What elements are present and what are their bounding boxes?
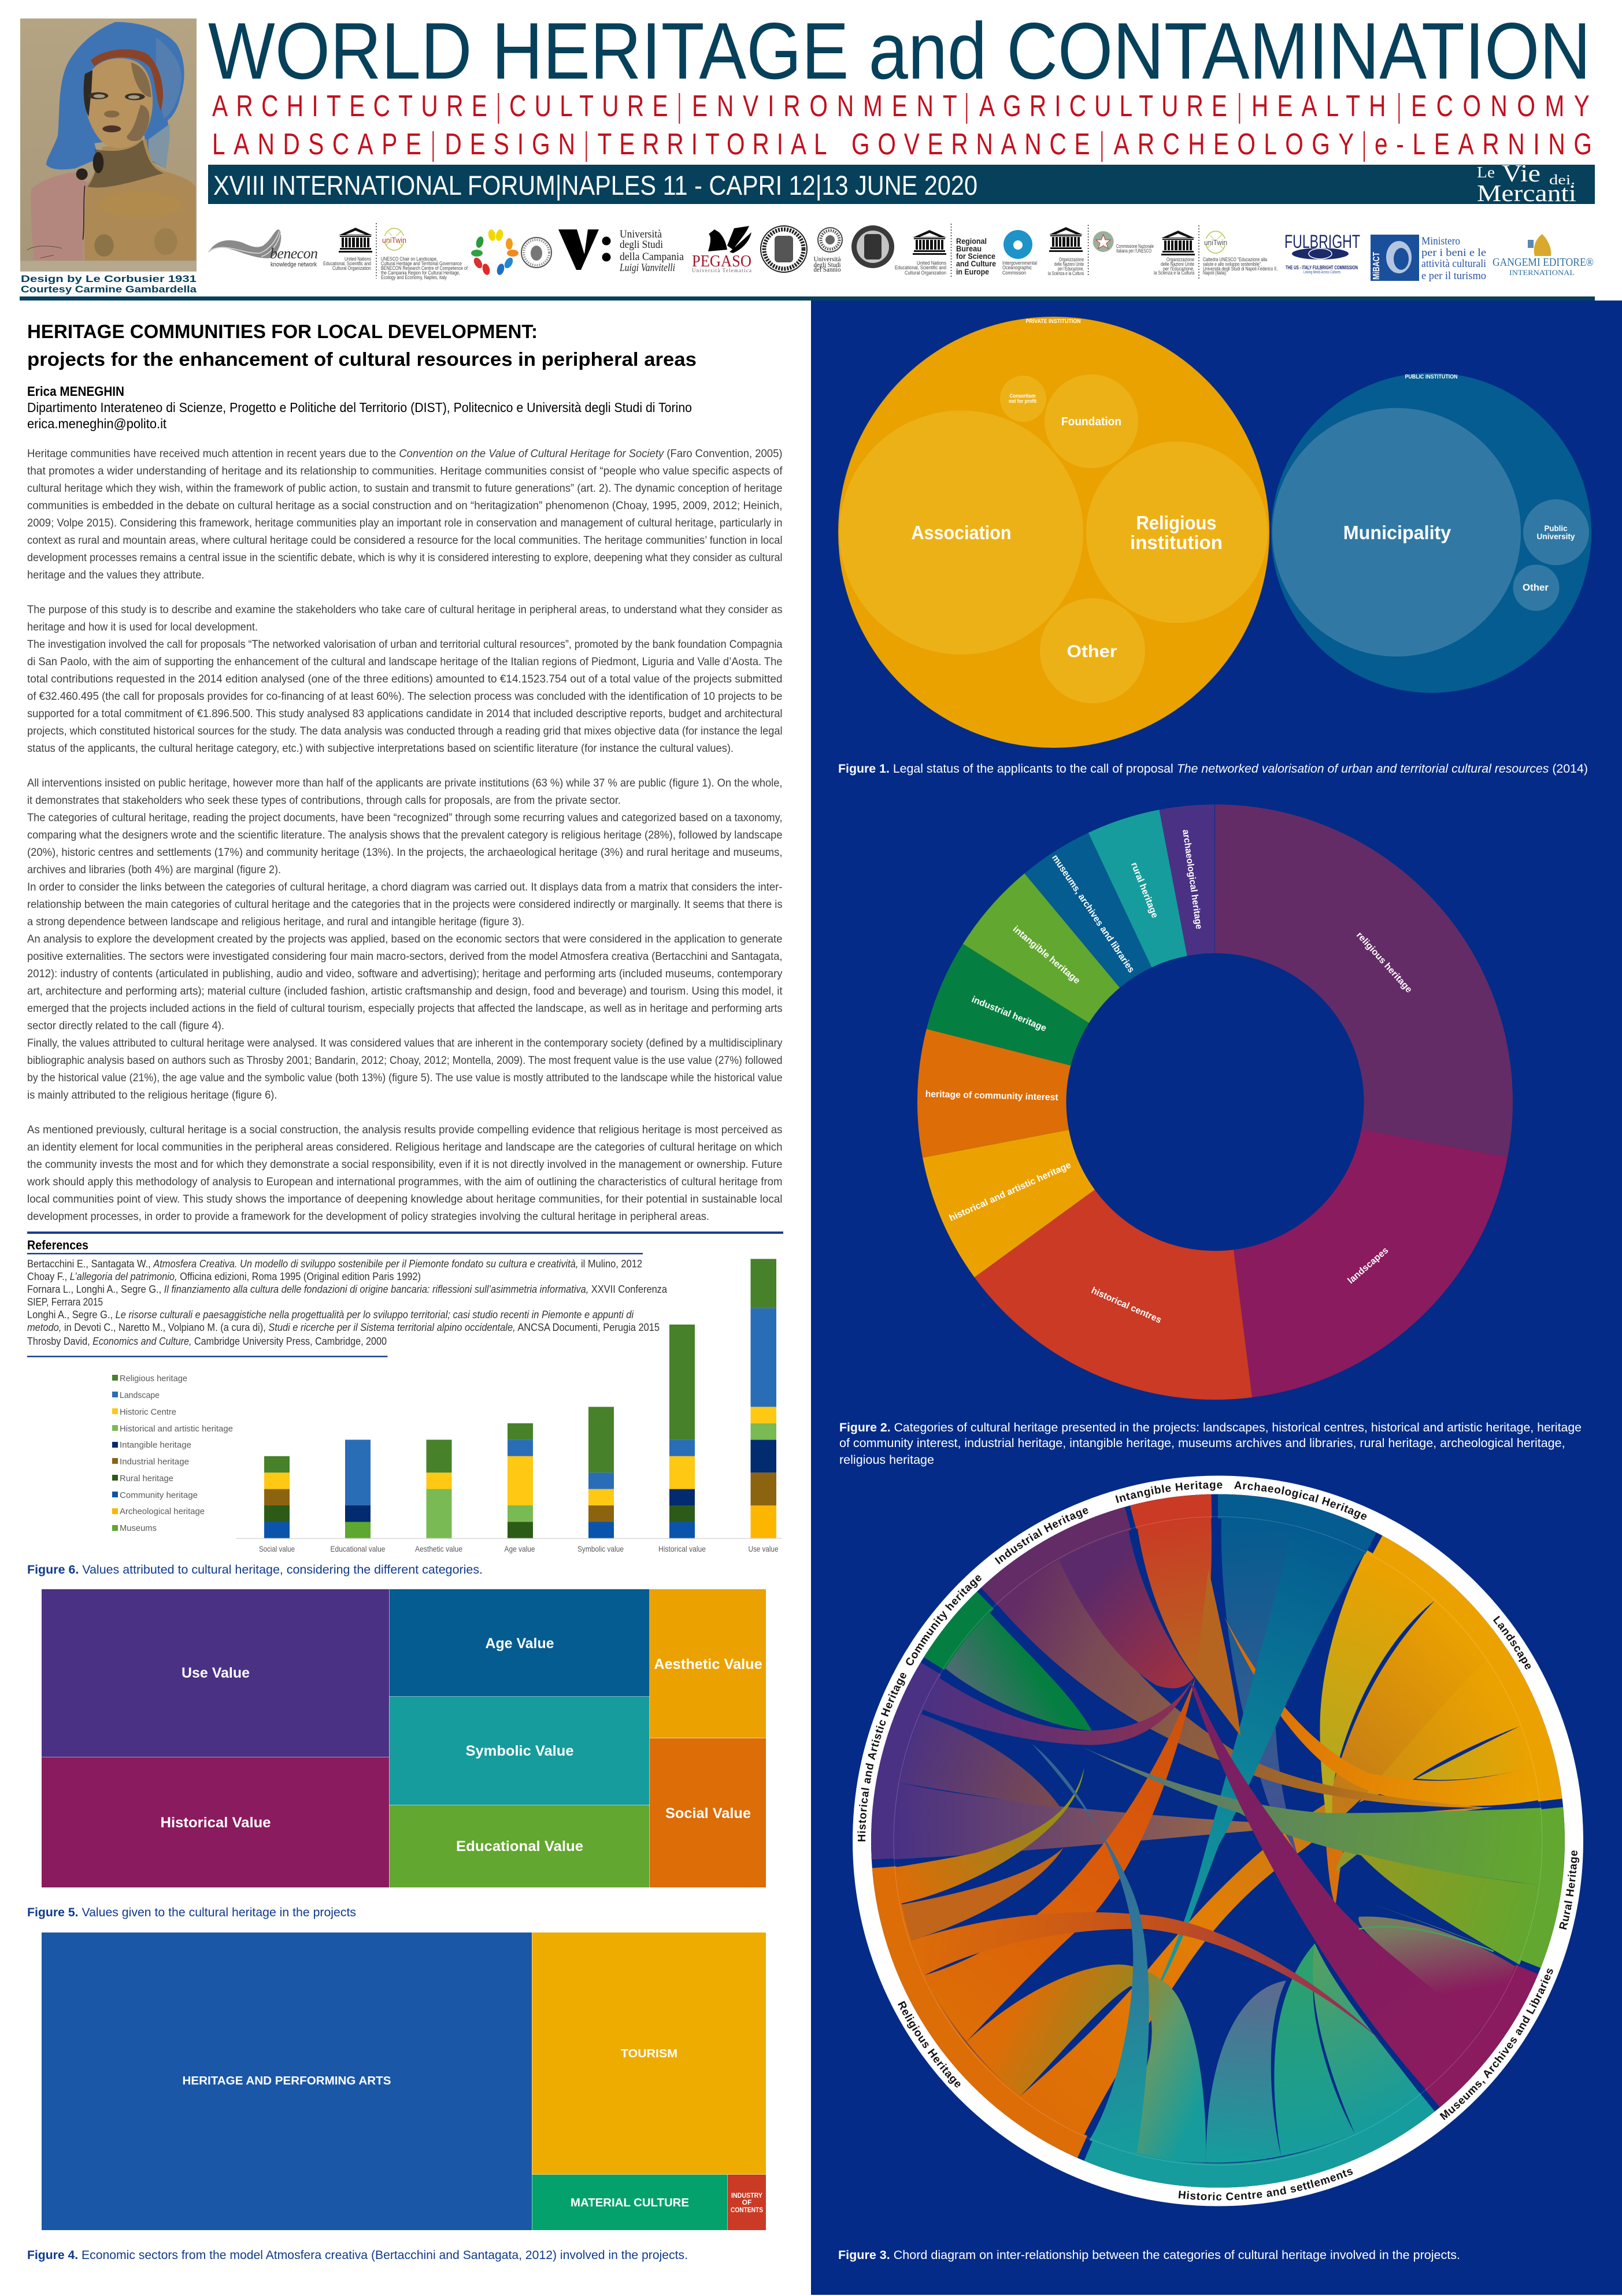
chart legend: Historical and artistic heritage — [120, 1424, 233, 1434]
donut labels: rural heritage — [1129, 861, 1160, 919]
logo: UNESCO Italian commission: per l'Educazione, — [1058, 266, 1084, 272]
cell: symbolic value — [390, 1697, 650, 1805]
bar: age value — [508, 1423, 533, 1538]
logo: Vanvitelli: della Campania — [620, 251, 684, 263]
logo: Gangemi Editore: INTERNATIONAL — [1509, 268, 1575, 277]
forum date band — [208, 165, 1595, 204]
chart legend: Historic Centre — [120, 1407, 176, 1417]
paragraph: results: positive externalities. The sectors were investigated considering four main macro-sectors, derived from the model Atmosfera creativa (Bertacchini and Santagata, — [27, 951, 783, 963]
logo: UNESCO Regional Bureau: for Science — [956, 251, 995, 261]
bubble group: private institution: institution — [1130, 532, 1223, 553]
chord ribbons — [894, 1515, 1543, 2163]
subtitle disciplines: | — [1238, 88, 1242, 124]
logo: UNESCO chair Health: Organizzazione — [1166, 257, 1194, 262]
Le Vie dei Mercanti logotype: dei. — [1549, 173, 1575, 188]
logo: Vanvitelli: Luigi Vanvitelli — [619, 262, 675, 274]
logo: UNESCO chair Health — [1154, 225, 1277, 280]
paragraph: results: art, architecture and performing arts); material culture (included fashion, artistic craftsmanship and design, food and beverage) and tourism. Using this model, it — [27, 985, 783, 997]
logo: UNESCO chair Landscape: Cultural Organization — [332, 265, 371, 271]
axis labels — [259, 1544, 779, 1553]
logo: Fulbright — [1284, 231, 1360, 275]
cell: material culture — [532, 2175, 727, 2230]
logo: UNESCO chair Landscape: uniTwin — [382, 236, 406, 244]
bar: use value — [750, 1259, 776, 1538]
portrait credit: Courtesy Carmine Gambardella — [21, 284, 197, 295]
bubble group: private institution: not for profit — [1009, 398, 1036, 404]
logo: Gangemi Editore: GANGEMI EDITORE® — [1493, 256, 1594, 269]
cell: use value — [42, 1589, 389, 1757]
cell: historical value — [42, 1757, 389, 1887]
logo: UNESCO chair Health: la Scienza e la Cultura — [1154, 270, 1194, 276]
axis labels: Use value — [748, 1544, 779, 1553]
subtitle disciplines — [212, 88, 1592, 162]
axis labels: Aesthetic value — [415, 1544, 462, 1553]
caption: figure 3: Figure 3. Chord diagram on inter-relationship between the categories of cultural heritage involved in the projects. — [838, 2249, 1460, 2262]
article heading — [27, 321, 697, 370]
logo: Fulbright: THE US - ITALY FULBRIGHT COMMISSION — [1286, 265, 1358, 270]
donut segments — [992, 879, 1438, 1325]
logo: coloured hands ring — [471, 229, 519, 276]
logo: UNESCO Regional Bureau: Cultural Organization — [905, 270, 946, 276]
caption: figure 4: Figure 4. Economic sectors from the model Atmosfera creativa (Bertacchini and Santagata, 2012) involved in the projects. — [27, 2249, 688, 2262]
logo: Pegaso — [692, 226, 751, 273]
paragraph: results: it demonstrates that stakeholders who seek these types of contributions, through calls for proposals, are from the private sector. — [27, 795, 621, 807]
portrait credit — [21, 273, 197, 295]
cell: industry of contents: CONTENTS — [731, 2206, 763, 2214]
subtitle disciplines: CULTURE — [509, 89, 668, 123]
cell: industry of contents — [727, 2175, 766, 2230]
figure 4: economic sectors treemap — [42, 1933, 766, 2230]
logo: UNESCO chair Health: Università degli Studi di Napoli Federico II, — [1203, 266, 1277, 272]
paragraph: introduction: context as rural and mountain areas, where cultural heritage could be considered a resource for the local communities. The heritage communities’ function in local — [27, 535, 783, 547]
bar: symbolic value — [588, 1407, 614, 1538]
cell: historical value: Historical Value — [161, 1815, 271, 1831]
logo: Vanvitelli: Università — [620, 228, 662, 240]
cell: tourism — [532, 1933, 766, 2174]
paragraph: purpose — [27, 604, 783, 755]
axis labels: Age value — [504, 1544, 535, 1553]
logo: Pegaso: Università Telematica — [692, 268, 751, 273]
subtitle disciplines: DESIGN — [445, 127, 575, 161]
bubble group: private institution: Foundation — [1061, 416, 1121, 428]
logo: Fulbright: Linking Minds Across Cultures — [1303, 270, 1340, 275]
logo: Università del Sannio: degli Studi — [814, 261, 841, 269]
axis labels: Symbolic value — [577, 1544, 624, 1553]
logo: UNESCO chair Landscape: the Campania Region for Cultural Heritage, — [381, 270, 460, 276]
logo: UNESCO chair Landscape: BENECON Research Centre of Competence of — [381, 265, 468, 271]
subtitle disciplines: HEALTH — [1251, 89, 1386, 123]
logo: Università del Sannio — [814, 228, 842, 273]
cell: heritage and performing arts: HERITAGE AND PERFORMING ARTS — [183, 2075, 391, 2087]
bubble group: private institution: Association — [911, 522, 1012, 543]
cell: heritage and performing arts — [42, 1933, 532, 2230]
subtitle disciplines: | — [497, 88, 501, 124]
paragraph: results: (20%), historic centres and settlements (17%) and community heritage (13%). In the projects, the archaeological heritage (3%) and rural heritage and museums, — [27, 847, 783, 859]
bubble group: private institution — [838, 317, 1269, 748]
donut labels: landscapes — [1346, 1245, 1390, 1286]
bar: aesthetic value — [427, 1440, 452, 1538]
bubble group: public institution: Other — [1523, 582, 1549, 593]
cell: social value — [650, 1738, 766, 1887]
logo: UNESCO Italian commission: delle Nazioni Unite — [1054, 261, 1084, 267]
paragraph: conclusions: work should apply this methodology of analysis to European and international programmes, with the aim of outlining the characteristics of cultural heritage from — [27, 1176, 783, 1188]
subtitle disciplines: AGRICULTURE — [979, 89, 1227, 123]
cell: aesthetic value: Aesthetic Value — [654, 1656, 762, 1672]
header banner — [20, 6, 1595, 301]
paragraph: results: emerged that the projects included actions in the field of cultural tourism, especially projects that affected the landscape, as well as in heritage and performing arts — [27, 1003, 783, 1015]
cell: material culture: MATERIAL CULTURE — [571, 2197, 689, 2209]
portrait credit: Design by Le Corbusier 1931 — [21, 273, 197, 284]
caption: figure 2 — [839, 1421, 1582, 1467]
logo: UNESCO chair Health: Napoli (Italia) — [1203, 270, 1226, 276]
chord category labels: Rural Heritage — [1559, 1850, 1579, 1930]
subtitle disciplines: | — [1397, 88, 1401, 124]
paragraph: conclusions: local communities point of view. This study shows the importance of deepening knowledge about heritage communities, for their potential in sustainable local — [27, 1193, 783, 1206]
logo: MiBACT: Ministero — [1421, 235, 1460, 247]
bubble group: private institution: PRIVATE INSTITUTION — [1025, 318, 1081, 325]
chart legend: Religious heritage — [120, 1374, 187, 1383]
subtitle disciplines: | — [965, 88, 969, 124]
logo: UNESCO Regional Bureau: United Nations — [917, 260, 946, 266]
author block: Dipartimento Interateneo di Scienze, Progetto e Politiche del Territorio (DIST), Politecnico e Università degli Studi di Torino — [27, 400, 692, 415]
paragraph: results: archives and libraries (both 4%) are marginal (figure 2). — [27, 864, 281, 876]
subtitle disciplines: | — [1100, 126, 1104, 162]
logo: Vanvitelli: degli Studi — [620, 239, 663, 251]
paragraph: introduction: Heritage communities have received much attention in recent years due to the Convention on the Value of Cultural Heritage for Society (Faro Convention, 2005) — [27, 448, 782, 460]
author block — [27, 384, 692, 431]
logo: UNESCO Italian commission: Organizzazione — [1059, 257, 1084, 262]
chord category labels: Religious Heritage — [898, 2001, 961, 2087]
chart legend: Archeological heritage — [120, 1507, 205, 1516]
logo: UNESCO chair Health: salute e allo sviluppo sostenibile", — [1203, 261, 1262, 267]
paragraph: results: In order to consider the links between the categories of cultural heritage, a chord diagram was carried out. It displays data from a matrix that considers the inter- — [27, 881, 783, 893]
chart legend: Community heritage — [120, 1490, 198, 1500]
logo: MiBACT: attività culturali — [1421, 258, 1486, 270]
references block: Bertacchini E., Santagata W., Atmosfera Creativa. Un modello di sviluppo sostenibile per il Piemonte fondato su cultura e creatività, il Mulino, 2012 — [27, 1258, 642, 1270]
Le Vie dei Mercanti logotype: Vie — [1502, 161, 1540, 187]
donut labels: archaeological heritage — [1180, 829, 1203, 930]
subtitle disciplines: GOVERNANCE — [851, 127, 1090, 161]
chord category arcs — [883, 1506, 1553, 2175]
logo: dark seal — [851, 225, 894, 268]
chord category labels: Historical and Artistic Heritage — [857, 1672, 906, 1841]
paragraph: purpose: The investigation involved the call for proposals “The networked valorisation of urban and territorial cultural resources”, promoted by the bank foundation Compagnia — [27, 639, 783, 651]
logo: UNESCO Italian commission: Commissione Nazionale — [1116, 243, 1154, 249]
logo: benecon: benecon — [270, 245, 318, 262]
paragraph: results: The categories of cultural heritage, reading the project documents, have been “recognized” through some recurring values and categorized based on a taxonomy, — [27, 812, 783, 824]
paragraph: results: 2012): industry of contents (articulated in publishing, audio and video, software and advertising); heritage and performing arts (included museums, contemporary — [27, 968, 783, 980]
paragraph: results: Finally, the values attributed to cultural heritage were analysed. It was considered values that are inherent in the contemporary society (defined by a multidisciplinary — [27, 1037, 783, 1049]
paragraph: results: All interventions insisted on public heritage, however more than half of the applicants are private institutions (63 %) while 37 % are public (figure 1). On the whole, — [27, 777, 783, 789]
references block: Fornara L., Longhi A., Segre G., Il finanziamento alla cultura delle fondazioni di origine bancaria: riflessioni sull’asimmetria informativa, XXVII Conferenza — [27, 1283, 668, 1295]
chord category labels: Landscape — [1493, 1616, 1531, 1670]
figure 3: chord diagram — [853, 1476, 1583, 2206]
paragraph: purpose: total contributions requested in the 2014 edition analysed (one of the three editions) amounted to €14.1523.754 out of a total value of the projects submitted — [27, 673, 783, 685]
logo: UNESCO chair Landscape: Educational, Scientific and — [323, 261, 371, 266]
paragraph: conclusions: the community invests the most and for which they demonstrate a social responsibility, even if it is not directly involved in the management or ownership. Future — [27, 1159, 783, 1171]
logo: Università del Sannio: del Sannio — [814, 265, 840, 273]
panel: figures column — [811, 301, 1622, 2295]
forum date band: XVIII INTERNATIONAL FORUM|NAPLES 11 - CAPRI 12|13 JUNE 2020 — [213, 170, 977, 201]
axis labels: Historical value — [658, 1544, 706, 1553]
paragraph: conclusions — [27, 1124, 783, 1223]
logo: Intergovernmental Oceanographic Commission: Intergovernmental — [1002, 260, 1037, 266]
logo: university seal — [761, 226, 807, 272]
chord category labels — [857, 1481, 1579, 2201]
paragraph: introduction: 2009; Volpe 2015). Considering this framework, heritage communities play an important role in conservation and management of cultural heritage, particularly in — [27, 517, 783, 529]
logo: benecon: knowledge network — [271, 261, 317, 268]
paragraph: results: relationship between the main categories of cultural heritage and the categories that in the projects were considered indirectly or marginally. It seems that there is — [27, 899, 783, 911]
logo: Università del Sannio: Università — [814, 255, 841, 263]
logo: UNESCO Regional Bureau: Educational, Scientific and — [895, 265, 946, 270]
logo: UNESCO Regional Bureau: and Culture — [956, 259, 996, 268]
bar: social value — [264, 1456, 290, 1538]
chart legend: Rural heritage — [120, 1474, 173, 1483]
subtitle disciplines: ARCHEOLOGY — [1113, 127, 1354, 161]
logo: UNESCO chair Health: per l'Educazione, — [1163, 266, 1194, 272]
chord category labels: Archaeological Heritage — [1234, 1481, 1367, 1520]
logo: Valencia seal — [521, 238, 551, 268]
article heading: projects for the enhancement of cultural resources in peripheral areas — [27, 348, 697, 370]
chord category labels: Historic Centre and settlements — [1178, 2169, 1353, 2201]
donut labels: historical and artistic heritage — [948, 1160, 1073, 1223]
donut labels: heritage of community interest — [925, 1089, 1058, 1103]
logo: UNESCO chair Health: delle Nazioni Unite — [1161, 261, 1194, 267]
Le Vie dei Mercanti logotype: Mercanti — [1477, 180, 1576, 206]
caption: figure 1: Figure 1. Legal status of the applicants to the call of proposal The networked valorisation of urban and territorial cultural resources (2014) — [838, 762, 1588, 776]
bubble group: public institution — [1271, 373, 1591, 693]
figure 6: stacked bar chart — [112, 1259, 782, 1553]
paragraph: conclusions: an identity element for local communities in the peripheral areas considered. Religious heritage and landscape are the categories of cultural heritage on which — [27, 1141, 783, 1153]
logo: Intergovernmental Oceanographic Commission: Commission — [1002, 270, 1026, 276]
paragraph: results — [27, 777, 783, 1101]
subtitle disciplines: ENVIRONMENT — [692, 89, 957, 123]
subtitle disciplines: TERRITORIAL — [598, 127, 827, 161]
Le Vie dei Mercanti logotype: Le — [1477, 164, 1495, 181]
cell: symbolic value: Symbolic Value — [466, 1743, 574, 1759]
donut labels: intangible heritage — [1011, 924, 1082, 986]
logo: MiBACT — [1371, 235, 1486, 282]
cell: industry of contents: OF — [742, 2198, 751, 2206]
logo: Intergovernmental Oceanographic Commission: Oceanographic — [1002, 265, 1032, 270]
chart legend: Museums — [120, 1523, 157, 1533]
figure 2: donut chart of categories — [925, 829, 1438, 1326]
logo: UNESCO Regional Bureau: in Europe — [956, 267, 989, 276]
logo: benecon — [208, 229, 318, 268]
subtitle disciplines: | — [1362, 126, 1366, 162]
bubble group: private institution: Consortium — [1009, 393, 1036, 399]
paragraph: purpose: heritage and how it is used for local development. — [27, 621, 258, 633]
paragraph: introduction: development processes remains a central issue in the scientific debate, which is why it is considered interesting to explore, deepening what they consider as cultural — [27, 552, 783, 564]
paragraph: results: a strong dependence between landscape and religious heritage, and rural and intangible heritage (figure 3). — [27, 916, 524, 928]
chart legend: Intangible heritage — [120, 1440, 191, 1450]
logo: MiBACT: MiBACT — [1372, 252, 1382, 280]
paragraph: results: sector directly related to the call (figure 4). — [27, 1020, 224, 1032]
subtitle disciplines: ECONOMY — [1411, 89, 1590, 123]
Le Vie dei Mercanti logotype — [1477, 161, 1576, 206]
paragraph: introduction: heritage and the values they attribute. — [27, 569, 205, 581]
bar: educational value — [345, 1440, 371, 1538]
donut labels: historical centres — [1090, 1286, 1163, 1326]
paragraph: purpose: status of the applicants, the cultural heritage category, etc.) with subjective interpretations based on scientific literature (for instance the cultural values). — [27, 743, 734, 755]
caption: figure 2: religious heritage — [839, 1453, 934, 1467]
logo: UNESCO Italian commission: la Scienza e la Cultura — [1048, 270, 1084, 276]
subtitle disciplines: e-LEARNING — [1375, 127, 1592, 161]
paragraph: purpose: projects, which constituted historical sources for the study. The data analysis was conducted through a reading grid that mixes objective data (for instance the legal — [27, 725, 783, 737]
caption: figure 5: Figure 5. Values given to the cultural heritage in the projects — [27, 1906, 356, 1919]
logo: UNESCO chair Landscape: United Nations — [345, 256, 371, 262]
bubble group: public institution: University — [1536, 532, 1575, 541]
references block: metodo, in Devoti C., Naretto M., Volpiano M. (a cura di), Studi e ricerche per il Sistema territorial alpino occidentale, ANCSA Documenti, Perugia 2015 — [27, 1321, 660, 1333]
chord category labels: Community heritage — [906, 1575, 982, 1666]
paragraph: conclusions: As mentioned previously, cultural heritage is a social construction, the analysis results provide compelling evidence that religious heritage is most perceived as — [27, 1124, 783, 1136]
logo: UNESCO Regional Bureau — [895, 224, 996, 279]
cell: social value: Social Value — [665, 1805, 751, 1822]
axis labels: Educational value — [331, 1544, 386, 1553]
paragraph: introduction: cultural heritage which they wish, within the framework of public action, to sustain and transmit to future generations” (art. 2). The dynamic conception of heritage — [27, 483, 783, 495]
header rule — [20, 296, 1595, 301]
references block: Longhi A., Segre G., Le risorse culturali e paesaggistiche nella progettualità per lo sviluppo territorial; casi studio recenti in Piemonte e appunti di — [27, 1308, 634, 1321]
portrait illustration by Le Corbusier — [20, 18, 197, 272]
paragraph: purpose: of €32.460.495 (the call for proposals provides for co-financing of at least 60%). The selection process was concluded with the identification of 10 projects to be — [27, 691, 783, 703]
caption: figure 6: Figure 6. Values attributed to cultural heritage, considering the different categories. — [27, 1563, 483, 1577]
subtitle disciplines: | — [431, 126, 435, 162]
paragraph: introduction: communities is embedded in the debate on cultural heritage as a social construction and on “heritagization” phenomenon (Choay, 1995, 2009, 2012; Heinich, — [27, 500, 783, 512]
logo: Pegaso: PEGASO — [692, 252, 751, 270]
logo: UNESCO chair Health: uniTwin — [1204, 238, 1227, 247]
paragraph: conclusions: development processes, in order to provide a framework for the development of policy strategies involving the cultural heritage in peripheral areas. — [27, 1211, 709, 1223]
logo: UNESCO chair Landscape: Cultural Heritage and Territorial Governance — [381, 261, 462, 266]
cell: tourism: TOURISM — [621, 2048, 677, 2060]
donut labels: industrial heritage — [970, 995, 1048, 1034]
axis labels: Social value — [259, 1544, 295, 1553]
cell: age value: Age Value — [486, 1635, 554, 1652]
cell: aesthetic value — [650, 1589, 766, 1738]
paragraph: results: bibliographic analysis based on authors such as Throsby 2001; Bandarin, 2012; Choay, 2012; Montella, 2009). The most frequent value is the use value (27%) followed — [27, 1055, 783, 1067]
chart legend: Industrial heritage — [120, 1457, 189, 1467]
logo: Intergovernmental Oceanographic Commission — [1002, 230, 1037, 276]
chord ring — [862, 1485, 1574, 2197]
paragraph: purpose: di San Paolo, with the aim of supporting the enhancement of the cultural and landscape heritage of the Italian regions of Piedmont, Liguria and Valle d’Aosta. The — [27, 656, 783, 668]
bar: historical value — [669, 1325, 695, 1538]
bubble group: public institution: PUBLIC INSTITUTION — [1405, 374, 1458, 380]
logo: MiBACT: e per il turismo — [1421, 270, 1486, 282]
panel: article text — [27, 321, 783, 1223]
references block: References — [27, 1238, 88, 1252]
logo: UNESCO Regional Bureau: Bureau — [956, 244, 982, 253]
bubble group: private institution: Religious — [1136, 512, 1216, 533]
bubble group: public institution: Public — [1545, 524, 1568, 533]
paragraph: purpose: The purpose of this study is to describe and examine the stakeholders who take care of cultural heritage in peripheral areas, to understand what they consider as — [27, 604, 783, 616]
author block: Erica MENEGHIN — [27, 384, 124, 399]
logo: UNESCO chair Landscape — [323, 223, 468, 280]
paragraph: results: comparing what the designers wrote and the scientific literature. The analysis shows that the prevalent category is religious heritage (28%), followed by landscape — [27, 829, 783, 841]
paragraph: results: is mainly attributed to the religious heritage (figure 6). — [27, 1089, 277, 1101]
logo: UNESCO Italian commission — [1048, 225, 1154, 276]
author block: erica.meneghin@polito.it — [27, 416, 167, 431]
cell: age value — [390, 1589, 650, 1697]
subtitle disciplines: LANDSCAPE — [212, 127, 421, 161]
paragraph: results: by the historical value (21%), the age value and the symbolic value (both 13%) (figure 5). The use value is mostly attributed to the landscape while the historical value — [27, 1072, 783, 1084]
references block: Throsby David, Economics and Culture, Cambridge University Press, Cambridge, 2000 — [27, 1335, 387, 1347]
logo: UNESCO chair Landscape: Ecology and Economy, Naples, Italy — [381, 275, 447, 280]
chord category labels: Intangible Heritage — [1116, 1481, 1222, 1503]
subtitle disciplines: | — [677, 88, 682, 124]
bubble group: private institution: Other — [1067, 642, 1117, 661]
article heading: HERITAGE COMMUNITIES FOR LOCAL DEVELOPMENT: — [27, 321, 538, 342]
chart legend: Landscape — [120, 1390, 160, 1400]
caption: figure 2: Figure 2. Categories of cultural heritage presented in the projects: landscapes, historical centres, historical and artistic heritage, heritage — [839, 1421, 1582, 1434]
references block — [27, 1232, 783, 1357]
subtitle disciplines: | — [584, 126, 588, 162]
donut labels — [925, 829, 1414, 1326]
cell: industry of contents: INDUSTRY — [731, 2191, 762, 2199]
chord category labels: Museums, Archives and Libraries — [1439, 1968, 1553, 2120]
cell: educational value: Educational Value — [456, 1838, 583, 1854]
logo: UNESCO Regional Bureau: Regional — [956, 236, 987, 246]
logo: Fulbright: FULBRIGHT — [1284, 231, 1360, 252]
paragraph: results: An analysis to explore the development created by the projects was applied, based on the economic sectors that were considered in the application to generate — [27, 933, 783, 945]
subtitle disciplines: ARCHITECTURE — [212, 89, 487, 123]
caption: figure 2: of community interest, industrial heritage, intangible heritage, museums archives and libraries, rural heritage, archeological heritage, — [839, 1437, 1565, 1450]
references block: Choay F., L’allegoria del patrimonio, Officina edizioni, Roma 1995 (Original edition Paris 1992) — [27, 1270, 421, 1282]
cell: educational value — [390, 1805, 650, 1887]
logo: UNESCO chair Health: Cattedra UNESCO "Educazione alla — [1203, 257, 1267, 262]
donut labels: museums, archives and libraries — [1050, 853, 1136, 974]
chart legend — [112, 1374, 233, 1533]
chord category labels: Industrial Heritage — [994, 1508, 1088, 1564]
donut labels: religious heritage — [1354, 930, 1414, 995]
logo: MiBACT: per i beni e le — [1421, 247, 1486, 259]
figure 5: values treemap — [42, 1589, 766, 1887]
logo: UNESCO chair Landscape: UNESCO Chair on Landscape, — [381, 256, 438, 262]
paragraph: purpose: supported for a total commitment of €1.896.500. This study analysed 83 applications candidate in 2014 that included descriptive reports, budget and architectural — [27, 708, 783, 720]
paragraph: introduction — [27, 448, 783, 581]
cell: use value: Use Value — [182, 1665, 250, 1681]
logo: UNESCO Italian commission: Italiana per l'UNESCO — [1116, 248, 1151, 254]
logo: Gangemi Editore — [1493, 234, 1594, 277]
references block: SIEP, Ferrara 2015 — [27, 1296, 103, 1308]
logo: Vanvitelli — [558, 228, 684, 274]
figure 1: bubble chart of legal status — [838, 317, 1591, 748]
paragraph: introduction: that promotes a wider understanding of heritage and its relationship to communities. Heritage communities consist of “people who value specific aspects of — [27, 465, 783, 477]
bubble group: public institution: Municipality — [1343, 522, 1451, 543]
